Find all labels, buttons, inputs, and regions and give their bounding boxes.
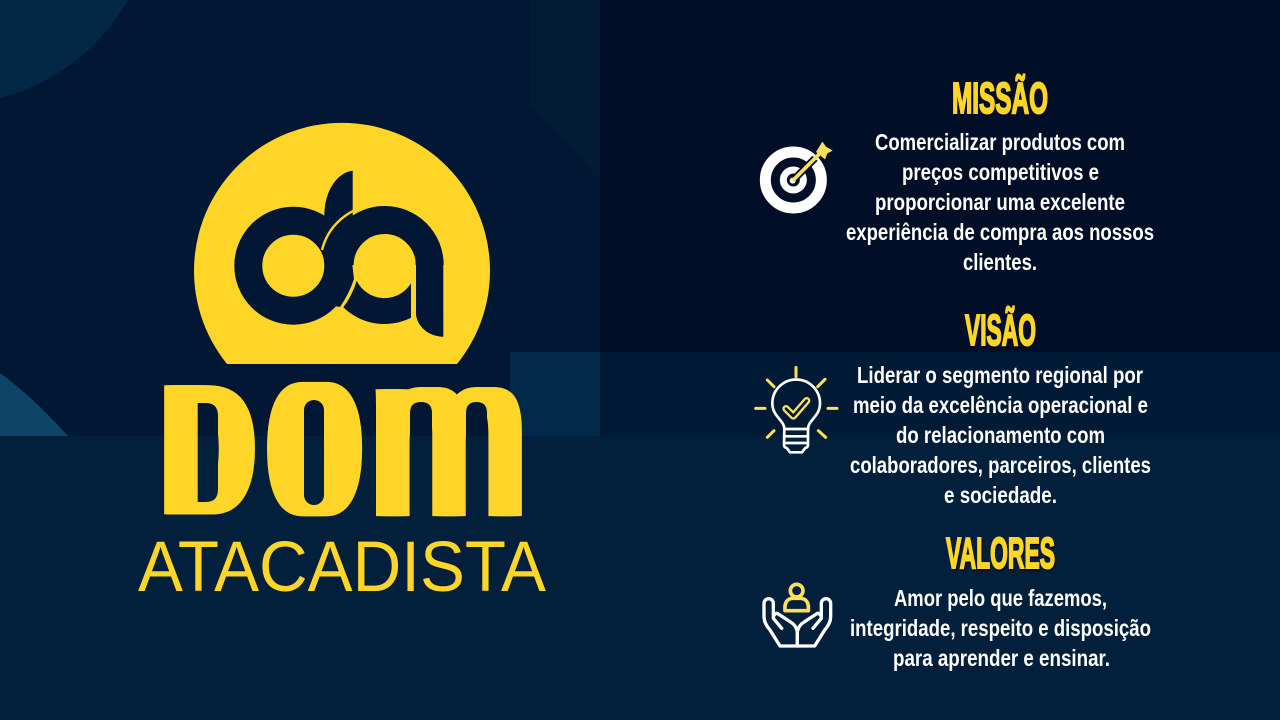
- heading: Valores: VALORES: [946, 529, 1055, 578]
- heading: Missão: MISSÃO: [952, 73, 1048, 123]
- text: Missão description: Comercializar produtos com: [875, 129, 1125, 155]
- section: Missão: [765, 73, 1154, 275]
- heading: Visão: VISÃO: [966, 307, 1037, 357]
- wordmark: DOM: m: [372, 300, 525, 569]
- text: Valores description: [850, 585, 1151, 671]
- text: Valores description: integridade, respeito e disposição: [850, 615, 1151, 641]
- text: Visão description: meio da excelência operacional e: [853, 392, 1148, 418]
- wordmark: ATACADISTA: ATACADISTA: [138, 528, 547, 607]
- text: Visão description: [850, 362, 1151, 508]
- text: Valores description: Amor pelo que fazemos,: [894, 585, 1107, 611]
- wordmark: DOM: O: [272, 352, 357, 576]
- logo emblem: yellow disc with da monogram: [194, 123, 490, 364]
- monogram d ring and stem: [248, 171, 354, 311]
- heading: Visão: [965, 305, 1037, 357]
- heading: Missão: [952, 73, 1049, 125]
- icon: hands holding person: [764, 584, 831, 646]
- heading: Visão: VISÃO: [965, 305, 1036, 355]
- heading: Missão: MISSÃO: [953, 75, 1049, 125]
- text: Visão description: Liderar o segmento regional por: [857, 362, 1143, 388]
- text: Visão description: e sociedade.: [944, 482, 1057, 508]
- text: Visão description: do relacionamento com: [896, 422, 1105, 448]
- text: Missão description: experiência de compra aos nossos: [846, 219, 1154, 245]
- heading: Valores: [946, 529, 1056, 580]
- icon: light bulb with check: [756, 367, 837, 452]
- text: Visão description: colaboradores, parceiros, clientes: [850, 452, 1151, 478]
- heading: Valores: VALORES: [947, 531, 1056, 580]
- section: Visão: [756, 305, 1151, 508]
- text: Missão description: clientes.: [963, 249, 1037, 275]
- text: Missão description: proporcionar uma excelente: [875, 189, 1125, 215]
- icon: target with arrow: [765, 142, 833, 208]
- text: Valores description: para aprender e ensinar.: [893, 645, 1110, 671]
- section: Valores: [764, 529, 1151, 671]
- text: Missão description: [846, 129, 1154, 275]
- wordmark: DOM: D: [164, 354, 251, 576]
- text: Missão description: preços competitivos e: [902, 159, 1099, 185]
- monogram a arch and tail: [322, 204, 443, 337]
